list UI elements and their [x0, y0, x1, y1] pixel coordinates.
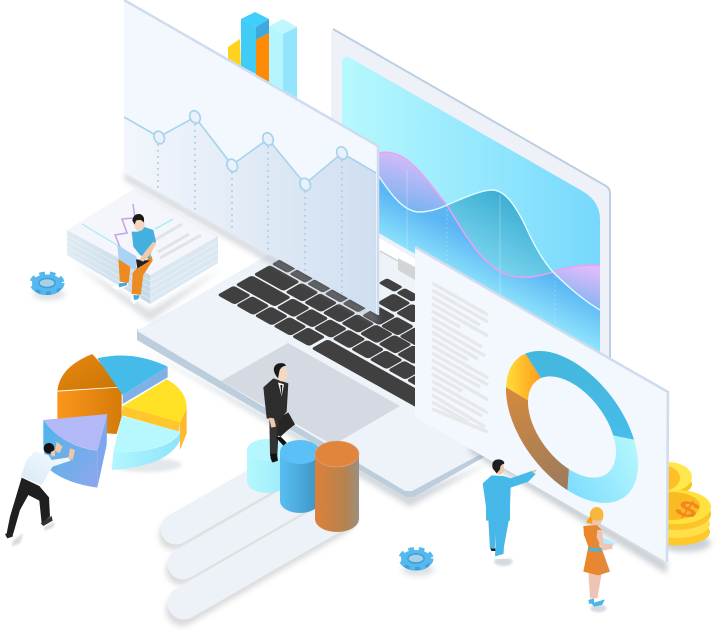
base deck: [137, 221, 612, 497]
purple slice: [43, 414, 107, 488]
businessman standing on cylinder: [263, 363, 295, 462]
line chart panel: [124, 0, 378, 325]
bar chart behind panel: [228, 12, 297, 98]
icon: left gear: [32, 274, 65, 300]
report panel with donut chart: [415, 247, 711, 574]
panel shadow: [470, 442, 667, 574]
pie chart with purple slice: [43, 354, 187, 488]
hinge: [380, 251, 415, 280]
blue sector: [97, 356, 168, 404]
cylinders: [247, 439, 359, 532]
orange sector: [57, 354, 122, 434]
man in blue pointing: [483, 459, 537, 566]
data points: [152, 109, 349, 192]
drop lines: [158, 124, 342, 296]
panel shadow: [124, 172, 378, 325]
coins behind panel: [643, 462, 711, 552]
trackpad: [221, 343, 400, 445]
screen wave chart: [340, 50, 602, 362]
laptop base shadow: [137, 345, 490, 507]
screen frame: [331, 29, 610, 372]
pie shadow: [112, 458, 182, 472]
donut chart: [506, 323, 638, 531]
text lines: [432, 283, 488, 432]
bars: finger shaped floor bands: [174, 458, 340, 610]
paper stack: [67, 188, 222, 322]
panel: [415, 247, 668, 562]
man pushing slice: [5, 442, 75, 547]
dollar sign: $: [670, 495, 706, 524]
keyboard: [217, 239, 541, 421]
yellow sector: [122, 379, 187, 450]
icon: bottom gear: [400, 549, 434, 576]
woman in orange dress: [583, 507, 615, 612]
seated person: [112, 214, 156, 304]
cyan sector: [112, 416, 180, 470]
laptop: [137, 29, 612, 507]
data line: [124, 117, 376, 184]
area under line: [124, 117, 376, 314]
stack of papers with seated person: [67, 188, 222, 322]
